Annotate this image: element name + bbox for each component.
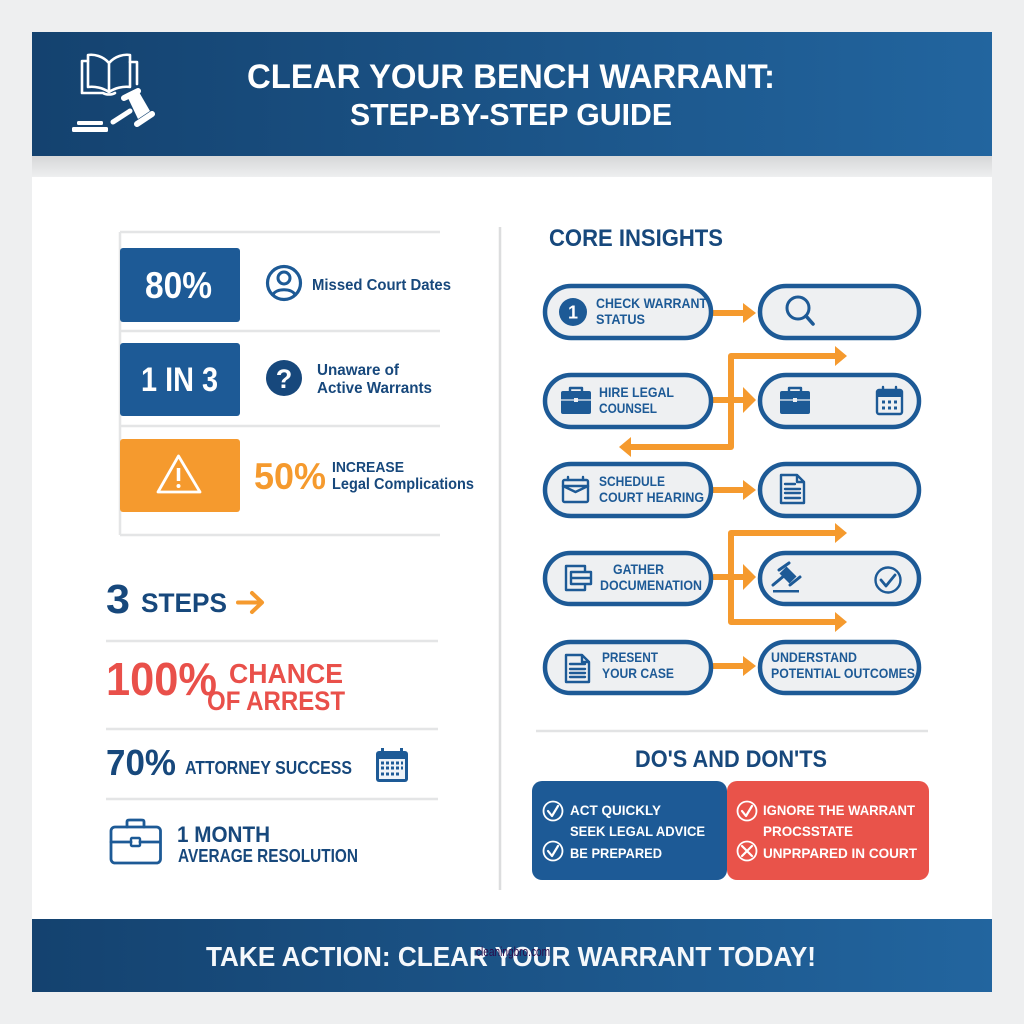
- stat: 70% attorney success: [106, 742, 408, 783]
- do's box: [532, 781, 727, 880]
- icon: cross: [738, 842, 756, 860]
- stat: 70% attorney success: 70%: [106, 742, 176, 783]
- icon: number one: [559, 298, 587, 326]
- step 3: schedule court hearing: SCHEDULE: [599, 473, 665, 489]
- icon: check: [544, 842, 562, 860]
- step 2: hire legal counsel: [545, 375, 711, 427]
- icon: check circle: [876, 568, 900, 592]
- icon: calendar: [877, 387, 902, 414]
- icon: document stack: [566, 566, 591, 590]
- arrow: row 5: [713, 656, 756, 676]
- step 3: schedule court hearing: [545, 464, 711, 516]
- step 4: gather documentation: [545, 553, 711, 604]
- icon: document: [566, 655, 589, 682]
- icon: briefcase outline: [111, 820, 160, 863]
- icon: orange arrow: [238, 593, 262, 612]
- icon: warning triangle: [158, 456, 200, 492]
- icon: document: [781, 475, 804, 503]
- stat: 1 in 3 unaware: 1 IN 3: [141, 361, 218, 399]
- arrow: row 1: [713, 303, 756, 323]
- icon: briefcase: [561, 388, 591, 414]
- step 3: schedule court hearing: COURT HEARING: [599, 489, 704, 505]
- step 1: check warrant status: [545, 286, 711, 338]
- don'ts box: PROCSSTATE: [763, 823, 853, 839]
- watermark: cleaningbro.com: [476, 944, 550, 959]
- stat: 1 month resolution: [111, 820, 358, 866]
- icon: magnifier: [787, 297, 813, 324]
- do's box: ACT QUICKLY: [570, 802, 662, 818]
- icon: question mark: ?: [276, 364, 292, 394]
- icon: check: [738, 802, 756, 820]
- icon: person: [268, 266, 300, 300]
- step 2: hire legal counsel: HIRE LEGAL: [599, 384, 674, 400]
- step 4: gather documentation: GATHER: [613, 561, 664, 577]
- stat: 100% chance of arrest: 100%: [106, 653, 217, 705]
- panel: lower statistics: [106, 576, 438, 866]
- stat: 1 in 3 unaware: Active Warrants: [317, 380, 432, 397]
- stat: 50% increase: Legal Complications: [332, 476, 474, 493]
- stat: 3 steps: [106, 576, 262, 622]
- stat: 80% missed court dates: 80%: [145, 265, 212, 306]
- result 5: understand potential outcomes: POTENTIAL OUTCOMES: [771, 665, 915, 681]
- footer banner: TAKE ACTION: CLEAR YOUR WARRANT TODAY!: [206, 941, 816, 972]
- result 5: understand potential outcomes: UNDERSTAND: [771, 649, 857, 665]
- icon: number one: 1: [568, 302, 578, 322]
- panel: top statistics: [120, 232, 474, 535]
- result 5: understand potential outcomes: [760, 642, 919, 693]
- stat: 70% attorney success: ATTORNEY SUCCESS: [185, 758, 352, 778]
- stat: 1 in 3 unaware: [120, 343, 432, 416]
- stat: 1 month resolution: AVERAGE RESOLUTION: [178, 846, 358, 866]
- step 1: check warrant status: STATUS: [596, 311, 645, 327]
- main white panel: [32, 177, 992, 919]
- icon: gavel: [773, 563, 800, 592]
- stat: 1 month resolution: 1 MONTH: [177, 822, 270, 847]
- result 1: search: [760, 286, 919, 338]
- don'ts box: IGNORE THE WARRANT: [763, 802, 915, 818]
- header banner: [32, 32, 992, 156]
- title: [247, 58, 775, 132]
- stat: 100% chance of arrest: [106, 653, 345, 716]
- icon: calendar envelope: [563, 477, 588, 502]
- step 4: gather documentation: DOCUMENATION: [600, 577, 702, 593]
- step 2: hire legal counsel: COUNSEL: [599, 400, 657, 416]
- arrow: branching connector row 2: [619, 346, 847, 457]
- don'ts box: [727, 781, 929, 880]
- stat: 50% increase: INCREASE: [332, 459, 404, 476]
- step 1: check warrant status: CHECK WARRANT: [596, 295, 707, 311]
- do's box: SEEK LEGAL ADVICE: [570, 823, 705, 839]
- stat: 50% increase: [120, 439, 474, 512]
- column divider: [499, 227, 501, 890]
- stat: 3 steps: 3: [106, 576, 130, 622]
- footer banner: [32, 919, 992, 992]
- icon: question mark: [266, 360, 302, 396]
- title: CLEAR YOUR BENCH WARRANT:: [247, 58, 775, 96]
- stat: 80% missed court dates: Missed Court Dates: [312, 277, 451, 294]
- stat: 100% chance of arrest: CHANCE: [229, 658, 343, 689]
- result 3: document: [760, 464, 919, 516]
- do's box: BE PREPARED: [570, 845, 662, 861]
- heading: do's and don'ts: DO'S AND DON'TS: [635, 746, 827, 773]
- step 5: present your case: PRESENT: [602, 649, 658, 665]
- step 5: present your case: [545, 642, 711, 693]
- stat: 50% increase: 50%: [254, 456, 326, 497]
- arrow: row 3: [713, 480, 756, 500]
- result 4: gavel and check: [760, 553, 919, 604]
- don'ts box: UNPRPARED IN COURT: [763, 845, 917, 861]
- stat: 100% chance of arrest: OF ARREST: [207, 686, 345, 716]
- stat: 80% missed court dates: [120, 248, 451, 322]
- arrow: branching connector row 4: [713, 523, 847, 632]
- stat: 3 steps: STEPS: [141, 588, 227, 618]
- title: STEP-BY-STEP GUIDE: [350, 97, 672, 132]
- step 5: present your case: YOUR CASE: [602, 665, 674, 681]
- heading: core insights: CORE INSIGHTS: [549, 225, 723, 252]
- panel: do's and don'ts: [532, 746, 929, 880]
- panel: core insights flow: [545, 225, 919, 693]
- icon: book and gavel: [72, 55, 152, 132]
- icon: calendar: [376, 748, 408, 782]
- icon: check: [544, 802, 562, 820]
- result 2: briefcase and calendar: [760, 375, 919, 427]
- stat: 1 in 3 unaware: Unaware of: [317, 362, 400, 379]
- icon: briefcase: [780, 388, 810, 414]
